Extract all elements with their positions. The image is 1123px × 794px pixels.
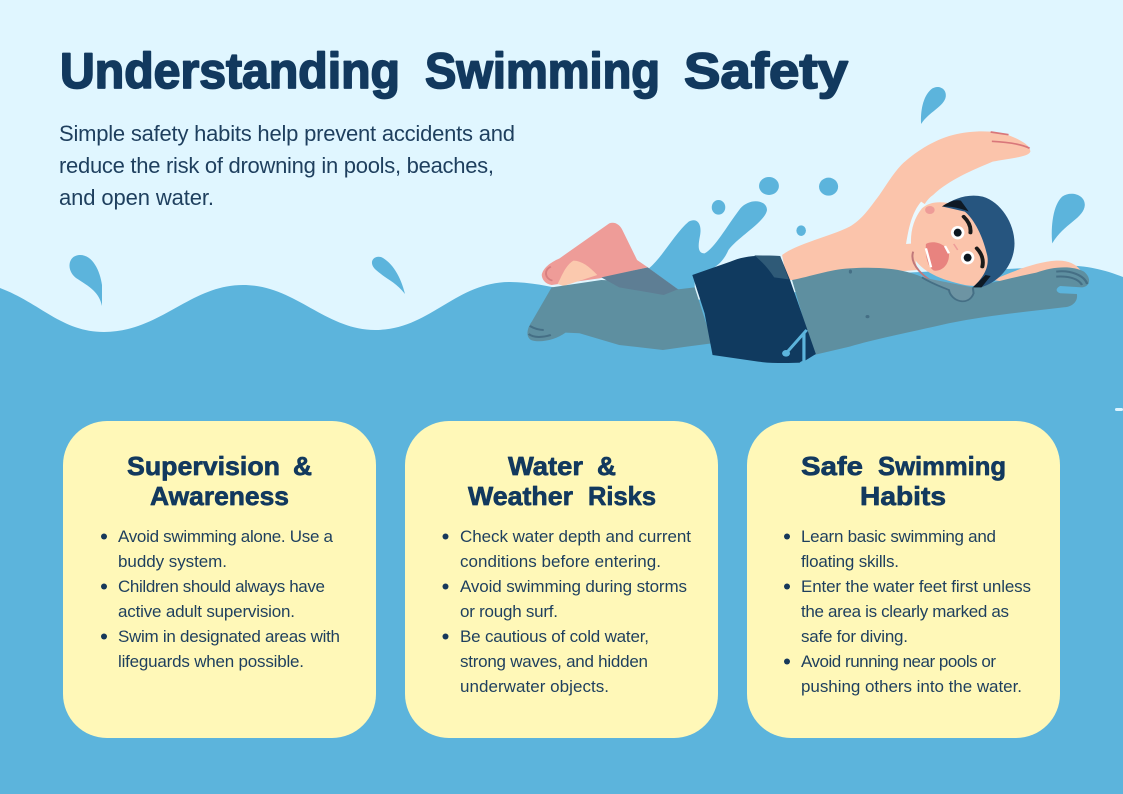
title: Swimming xyxy=(425,43,660,99)
submerged hand lines xyxy=(1056,271,1087,285)
bullet list: water and weather risks: Be cautious of cold water, xyxy=(460,627,649,646)
swimmer head xyxy=(906,196,1015,301)
heading: safe swimming habits: Swimming xyxy=(878,451,1006,481)
icon: water drop left xyxy=(70,255,102,306)
heading: water and weather risks: Water xyxy=(508,451,583,481)
heading: safe swimming habits: Habits xyxy=(860,481,946,511)
icon: right water drop xyxy=(1052,194,1085,243)
panel: supervision and awareness xyxy=(63,421,376,738)
fingers xyxy=(991,132,1030,148)
panel: water and weather risks xyxy=(405,421,718,738)
foot above water xyxy=(558,261,597,286)
bullet list: water and weather risks: conditions before entering. xyxy=(460,552,661,571)
tiny highlight at right edge xyxy=(1115,408,1123,411)
subtitle: Simple safety habits help prevent accidents and xyxy=(59,121,515,146)
submerged body xyxy=(527,280,713,350)
subtitle xyxy=(59,121,515,210)
splash droplets xyxy=(712,177,838,236)
bullet list: water and weather risks: underwater objects. xyxy=(460,677,609,696)
bullet list: supervision and awareness: Avoid swimming alone. Use a xyxy=(118,527,334,546)
bullet list: safe swimming habits: Learn basic swimming and xyxy=(801,527,996,546)
bullet list: water and weather risks xyxy=(442,527,691,696)
subtitle: and open water. xyxy=(59,185,214,210)
bullet list: supervision and awareness: active adult supervision. xyxy=(118,602,295,621)
title: Understanding xyxy=(60,43,400,99)
water streak by head xyxy=(906,202,931,244)
title xyxy=(60,43,848,99)
bullet list: safe swimming habits: Enter the water feet first unless xyxy=(801,577,1031,596)
bullet list: safe swimming habits: pushing others into the water. xyxy=(801,677,1022,696)
heading: supervision and awareness: Supervision xyxy=(127,451,280,481)
bullet list: safe swimming habits xyxy=(784,527,1031,696)
bullet list: supervision and awareness: lifeguards when possible. xyxy=(118,652,304,671)
darker submerged shin xyxy=(601,267,678,295)
heading: water and weather risks: Weather xyxy=(468,481,573,511)
icon: water drop middle xyxy=(372,257,405,294)
face xyxy=(911,202,995,286)
bullet list: safe swimming habits: floating skills. xyxy=(801,552,899,571)
swim shorts xyxy=(692,255,816,368)
bullet list: supervision and awareness: buddy system. xyxy=(118,552,227,571)
bullet list: water and weather risks: Check water depth and current xyxy=(460,527,691,546)
water splash xyxy=(649,201,767,290)
chin and neck outline xyxy=(912,252,949,290)
mouth xyxy=(926,242,949,271)
ear xyxy=(925,206,935,214)
heading: water and weather risks: Risks xyxy=(588,481,656,511)
nose xyxy=(954,244,958,250)
heading: safe swimming habits xyxy=(801,451,1006,511)
bullet list: water and weather risks: strong waves, and hidden xyxy=(460,652,648,671)
bullet list: supervision and awareness xyxy=(101,527,340,671)
swim cap xyxy=(943,196,1015,287)
raised arm and torso xyxy=(782,131,1030,280)
heading: supervision and awareness xyxy=(127,451,312,511)
bullet list: safe swimming habits: the area is clearly marked as xyxy=(801,602,1009,621)
back leg above water xyxy=(542,223,648,285)
eyebrows xyxy=(964,217,983,267)
bullet list: water and weather risks: or rough surf. xyxy=(460,602,558,621)
heading: safe swimming habits: Safe xyxy=(801,451,863,481)
water background xyxy=(0,265,1123,794)
body marks xyxy=(849,270,869,318)
icon: top water drop xyxy=(921,87,946,124)
hair xyxy=(942,200,969,212)
heading: water and weather risks xyxy=(468,451,656,511)
title: Safety xyxy=(684,43,848,99)
panel: safe swimming habits xyxy=(747,421,1060,738)
swimmer illustration xyxy=(527,87,1089,368)
far arm above water xyxy=(993,261,1081,283)
heading: water and weather risks: & xyxy=(597,451,616,481)
bullet list: safe swimming habits: safe for diving. xyxy=(801,627,908,646)
bullet list: supervision and awareness: Swim in designated areas with xyxy=(118,627,340,646)
subtitle: reduce the risk of drowning in pools, beaches, xyxy=(59,153,494,178)
bullet list: safe swimming habits: Avoid running near pools or xyxy=(801,652,996,671)
heading: supervision and awareness: & xyxy=(293,451,312,481)
bullet list: supervision and awareness: Children should always have xyxy=(118,577,325,596)
heading: supervision and awareness: Awareness xyxy=(150,481,289,511)
bullet list: water and weather risks: Avoid swimming during storms xyxy=(460,577,687,596)
eyes xyxy=(951,226,964,239)
